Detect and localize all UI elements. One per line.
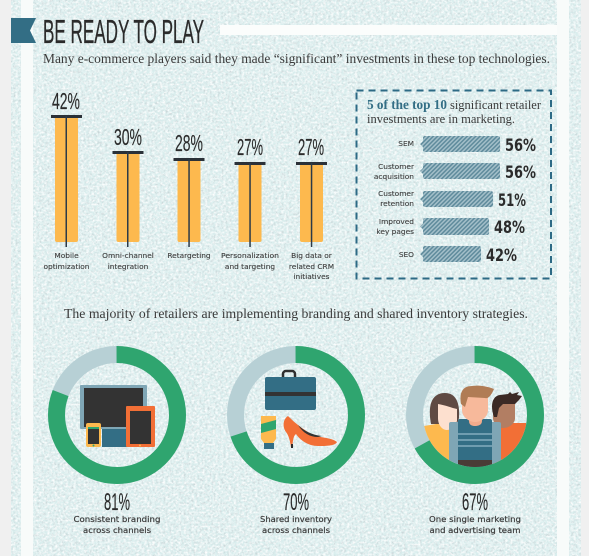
caption second line: across channels xyxy=(83,526,151,535)
caption: consistent branding: Consistent branding xyxy=(74,515,160,524)
caption second line: across channels xyxy=(262,526,330,535)
icon: briefcase, tube and shoe xyxy=(261,371,337,449)
row: customer retention 51%: retention xyxy=(380,199,414,208)
bar: big data or related CRM initiatives 27%: 27% xyxy=(298,134,324,160)
row: customer retention 51%: 51% xyxy=(498,191,526,211)
row: improved key pages 48%: key pages xyxy=(376,227,414,236)
caption: shared inventory: Shared inventory xyxy=(260,515,332,524)
title: BE READY TO PLAY xyxy=(43,13,204,50)
row: SEO 42%: SEO xyxy=(399,250,414,259)
bar chart: top technologies xyxy=(44,88,334,281)
bar: personalization and targeting 27%: Personalization xyxy=(221,251,279,260)
bar: omni-channel integration 30%: integration xyxy=(108,262,149,271)
bar: big data or related CRM initiatives 27%: related CRM xyxy=(289,262,334,271)
donut: shared inventory 70% xyxy=(236,354,356,535)
panel heading: significant retailer xyxy=(450,97,542,112)
row: customer retention 51%: Customer xyxy=(378,189,415,198)
bar: big data or related CRM initiatives 27%: initiatives xyxy=(294,272,330,281)
icon: three people xyxy=(424,386,526,472)
bar: big data or related CRM initiatives 27%: Big data or xyxy=(291,251,333,260)
row: SEM 56%: SEM xyxy=(398,139,414,148)
title rule xyxy=(220,25,557,35)
row: improved key pages 48%: Improved xyxy=(379,217,414,226)
row: SEM 56% xyxy=(398,136,536,156)
bar: mobile optimization 42%: 42% xyxy=(52,88,80,114)
row: customer retention 51% xyxy=(378,189,526,211)
bar: omni-channel integration 30% xyxy=(102,124,154,271)
bar: retargeting 28%: 28% xyxy=(175,130,203,156)
stat: 67%: 67% xyxy=(462,489,488,516)
stat: 70%: 70% xyxy=(283,489,309,516)
bar: mobile optimization 42%: Mobile xyxy=(54,251,79,260)
bar: personalization and targeting 27%: 27% xyxy=(237,134,263,160)
row: improved key pages 48% xyxy=(376,217,525,238)
title banner ribbon xyxy=(11,18,36,43)
panel heading highlight: 5 of the top 10 xyxy=(367,97,447,112)
donut: consistent branding 81% xyxy=(56,354,178,535)
bar: mobile optimization 42% xyxy=(44,88,90,271)
row: improved key pages 48%: 48% xyxy=(494,218,525,238)
bar: personalization and targeting 27% xyxy=(221,134,279,271)
panel heading second line: investments are in marketing. xyxy=(367,111,515,126)
icon: devices xyxy=(80,385,155,447)
row: customer acquisition 56%: 56% xyxy=(505,163,536,183)
section heading: The majority of retailers are implementing branding and shared inventory strategies. xyxy=(64,306,528,321)
bar: mobile optimization 42%: optimization xyxy=(44,262,90,271)
dashed panel border xyxy=(356,90,551,278)
row: SEO 42% xyxy=(399,246,517,266)
bar: omni-channel integration 30%: Omni-channel xyxy=(102,251,154,260)
row: customer acquisition 56%: Customer xyxy=(378,162,415,171)
bar: retargeting 28% xyxy=(167,130,211,260)
subtitle: Many e-commerce players said they made “significant” investments in these top technologies. xyxy=(43,51,550,66)
panel: marketing investments xyxy=(356,90,551,278)
row: SEM 56%: 56% xyxy=(505,136,536,156)
stat: 81%: 81% xyxy=(104,489,130,516)
bar: big data or related CRM initiatives 27% xyxy=(289,134,334,281)
bar: retargeting 28%: Retargeting xyxy=(167,251,211,260)
caption: one single marketing: One single marketing xyxy=(429,515,521,524)
donut: single marketing team 67% xyxy=(414,354,536,535)
row: customer acquisition 56%: acquisition xyxy=(374,172,414,181)
row: SEO 42%: 42% xyxy=(486,246,517,266)
bar: personalization and targeting 27%: and targeting xyxy=(225,262,275,271)
bar: omni-channel integration 30%: 30% xyxy=(114,124,142,150)
row: customer acquisition 56% xyxy=(374,162,536,183)
caption second line: and advertising team xyxy=(430,526,521,535)
